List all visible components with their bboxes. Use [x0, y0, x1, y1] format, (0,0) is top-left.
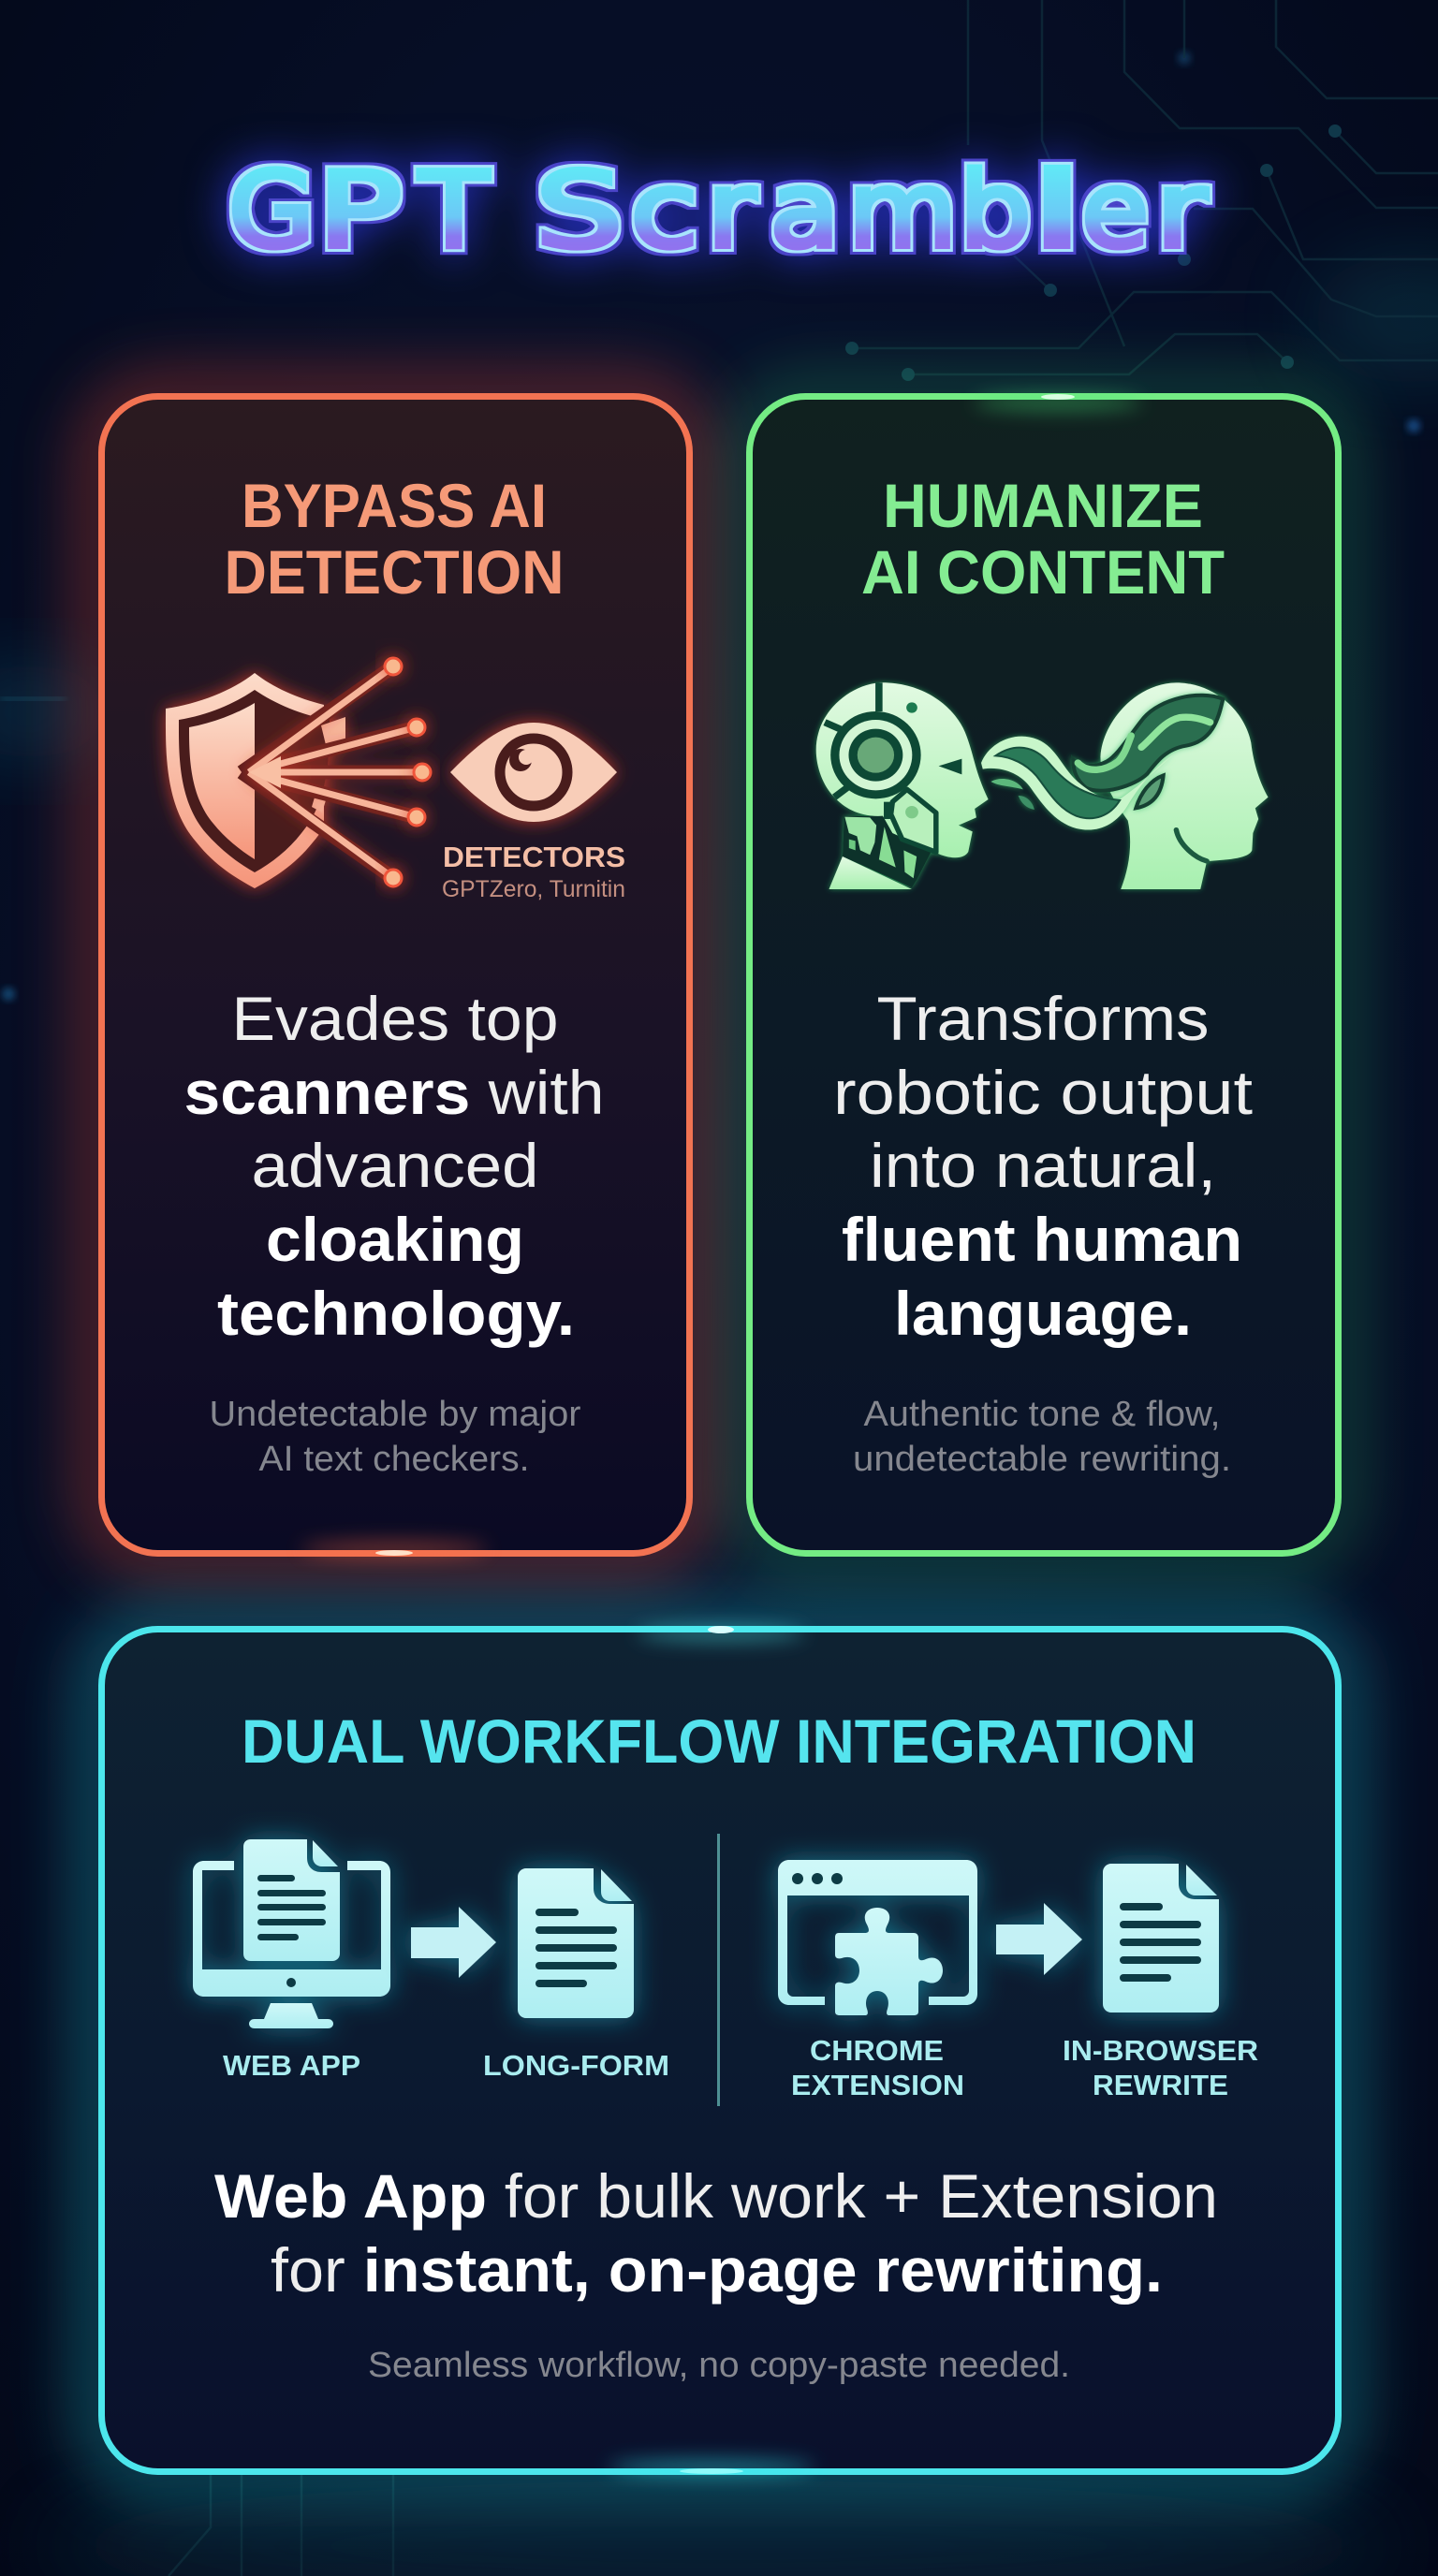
detectors label: GPTZero, Turnitin: [442, 876, 625, 902]
body text green: Transforms: [876, 984, 1210, 1053]
label: chrome extension: CHROME: [810, 2034, 944, 2067]
detectors label: DETECTORS: [443, 841, 625, 873]
title: S: [536, 149, 624, 271]
body text green: robotic output: [833, 1058, 1253, 1127]
title: T: [418, 149, 490, 271]
label: long-form: LONG-FORM: [483, 2049, 669, 2082]
title: P: [317, 150, 402, 272]
title: r: [1155, 151, 1208, 272]
label: in-browser rewrite: [1063, 2034, 1258, 2101]
body text cyan: for instant, on-page rewriting.: [271, 2235, 1163, 2305]
label: chrome extension: EXTENSION: [791, 2069, 964, 2101]
body text green: fluent human: [842, 1205, 1242, 1274]
label: in-browser rewrite: REWRITE: [1093, 2069, 1228, 2101]
icon: monitor with document: [193, 1839, 390, 2028]
title: l: [1030, 150, 1085, 272]
heading green: HUMANIZE: [883, 471, 1203, 540]
title: [228, 149, 1208, 272]
label: web app: WEB APP: [223, 2049, 360, 2082]
heading cyan: DUAL WORKFLOW INTEGRATION: [242, 1706, 1196, 1776]
icon: eye: [450, 723, 617, 822]
title: m: [848, 150, 957, 272]
bright spots cyan: [609, 1625, 814, 2476]
title: G: [228, 150, 315, 272]
glows behind panels: [101, 396, 1339, 2473]
icon: flowing wave: [981, 695, 1223, 830]
caption red: Undetectable by major: [210, 1395, 581, 1434]
caption cyan: Seamless workflow, no copy-paste needed.: [368, 2346, 1070, 2385]
body text red: advanced: [251, 1131, 539, 1200]
body text red: Evades top: [232, 984, 558, 1053]
icon: robot and human heads: [816, 682, 1269, 889]
panel frame green: [749, 397, 1339, 1554]
heading green: AI CONTENT: [861, 537, 1225, 607]
body text green: [833, 984, 1253, 1348]
arrow 2: [996, 1903, 1082, 1975]
icon: shield with rays and eye: [166, 658, 625, 902]
icon: browser with puzzle piece: [778, 1860, 977, 2015]
title: b: [959, 149, 1032, 271]
panel frame cyan: [101, 1629, 1339, 2471]
panel: bypass AI detection: [101, 397, 689, 1558]
heading red: DETECTION: [225, 537, 564, 607]
arrow 1: [411, 1907, 496, 1978]
caption red: [210, 1395, 581, 1479]
icon: robot head: [816, 682, 989, 889]
title: e: [1081, 150, 1149, 272]
heading red: BYPASS AI: [242, 471, 547, 540]
bright spot bottom red: [301, 1541, 488, 1558]
caption red: AI text checkers.: [258, 1440, 530, 1479]
body text red: scanners with: [183, 1058, 605, 1127]
body text red: technology.: [217, 1279, 575, 1348]
detectors label: [442, 841, 625, 902]
body text green: into natural,: [870, 1131, 1216, 1200]
heading red: [225, 471, 564, 607]
label: in-browser rewrite: IN-BROWSER: [1063, 2034, 1258, 2067]
caption green: [853, 1395, 1231, 1479]
icon: shield: [166, 673, 345, 888]
bright spot top green: [974, 394, 1142, 411]
body text red: cloaking: [266, 1205, 524, 1274]
icon: puzzle piece: [835, 1908, 943, 2015]
title: c: [630, 149, 698, 271]
caption green: undetectable rewriting.: [853, 1440, 1231, 1479]
title: a: [770, 149, 840, 271]
body text green: language.: [894, 1279, 1192, 1348]
divider: [717, 1834, 720, 2106]
label: chrome extension: [791, 2034, 964, 2101]
panel frame red: [101, 397, 689, 1554]
panel: humanize AI content: [749, 394, 1339, 1554]
heading green: [861, 471, 1225, 607]
title: r: [707, 151, 756, 272]
icon: in-browser document: [1103, 1864, 1219, 2012]
body text cyan: [214, 2161, 1218, 2305]
panel: dual workflow integration: [101, 1625, 1339, 2476]
icon: long-form document: [518, 1868, 634, 2018]
icon: rays: [242, 658, 431, 886]
icon: human head: [1100, 682, 1269, 889]
body text red: [183, 984, 605, 1348]
caption green: Authentic tone & flow,: [863, 1395, 1221, 1434]
body text cyan: Web App for bulk work + Extension: [214, 2161, 1218, 2231]
